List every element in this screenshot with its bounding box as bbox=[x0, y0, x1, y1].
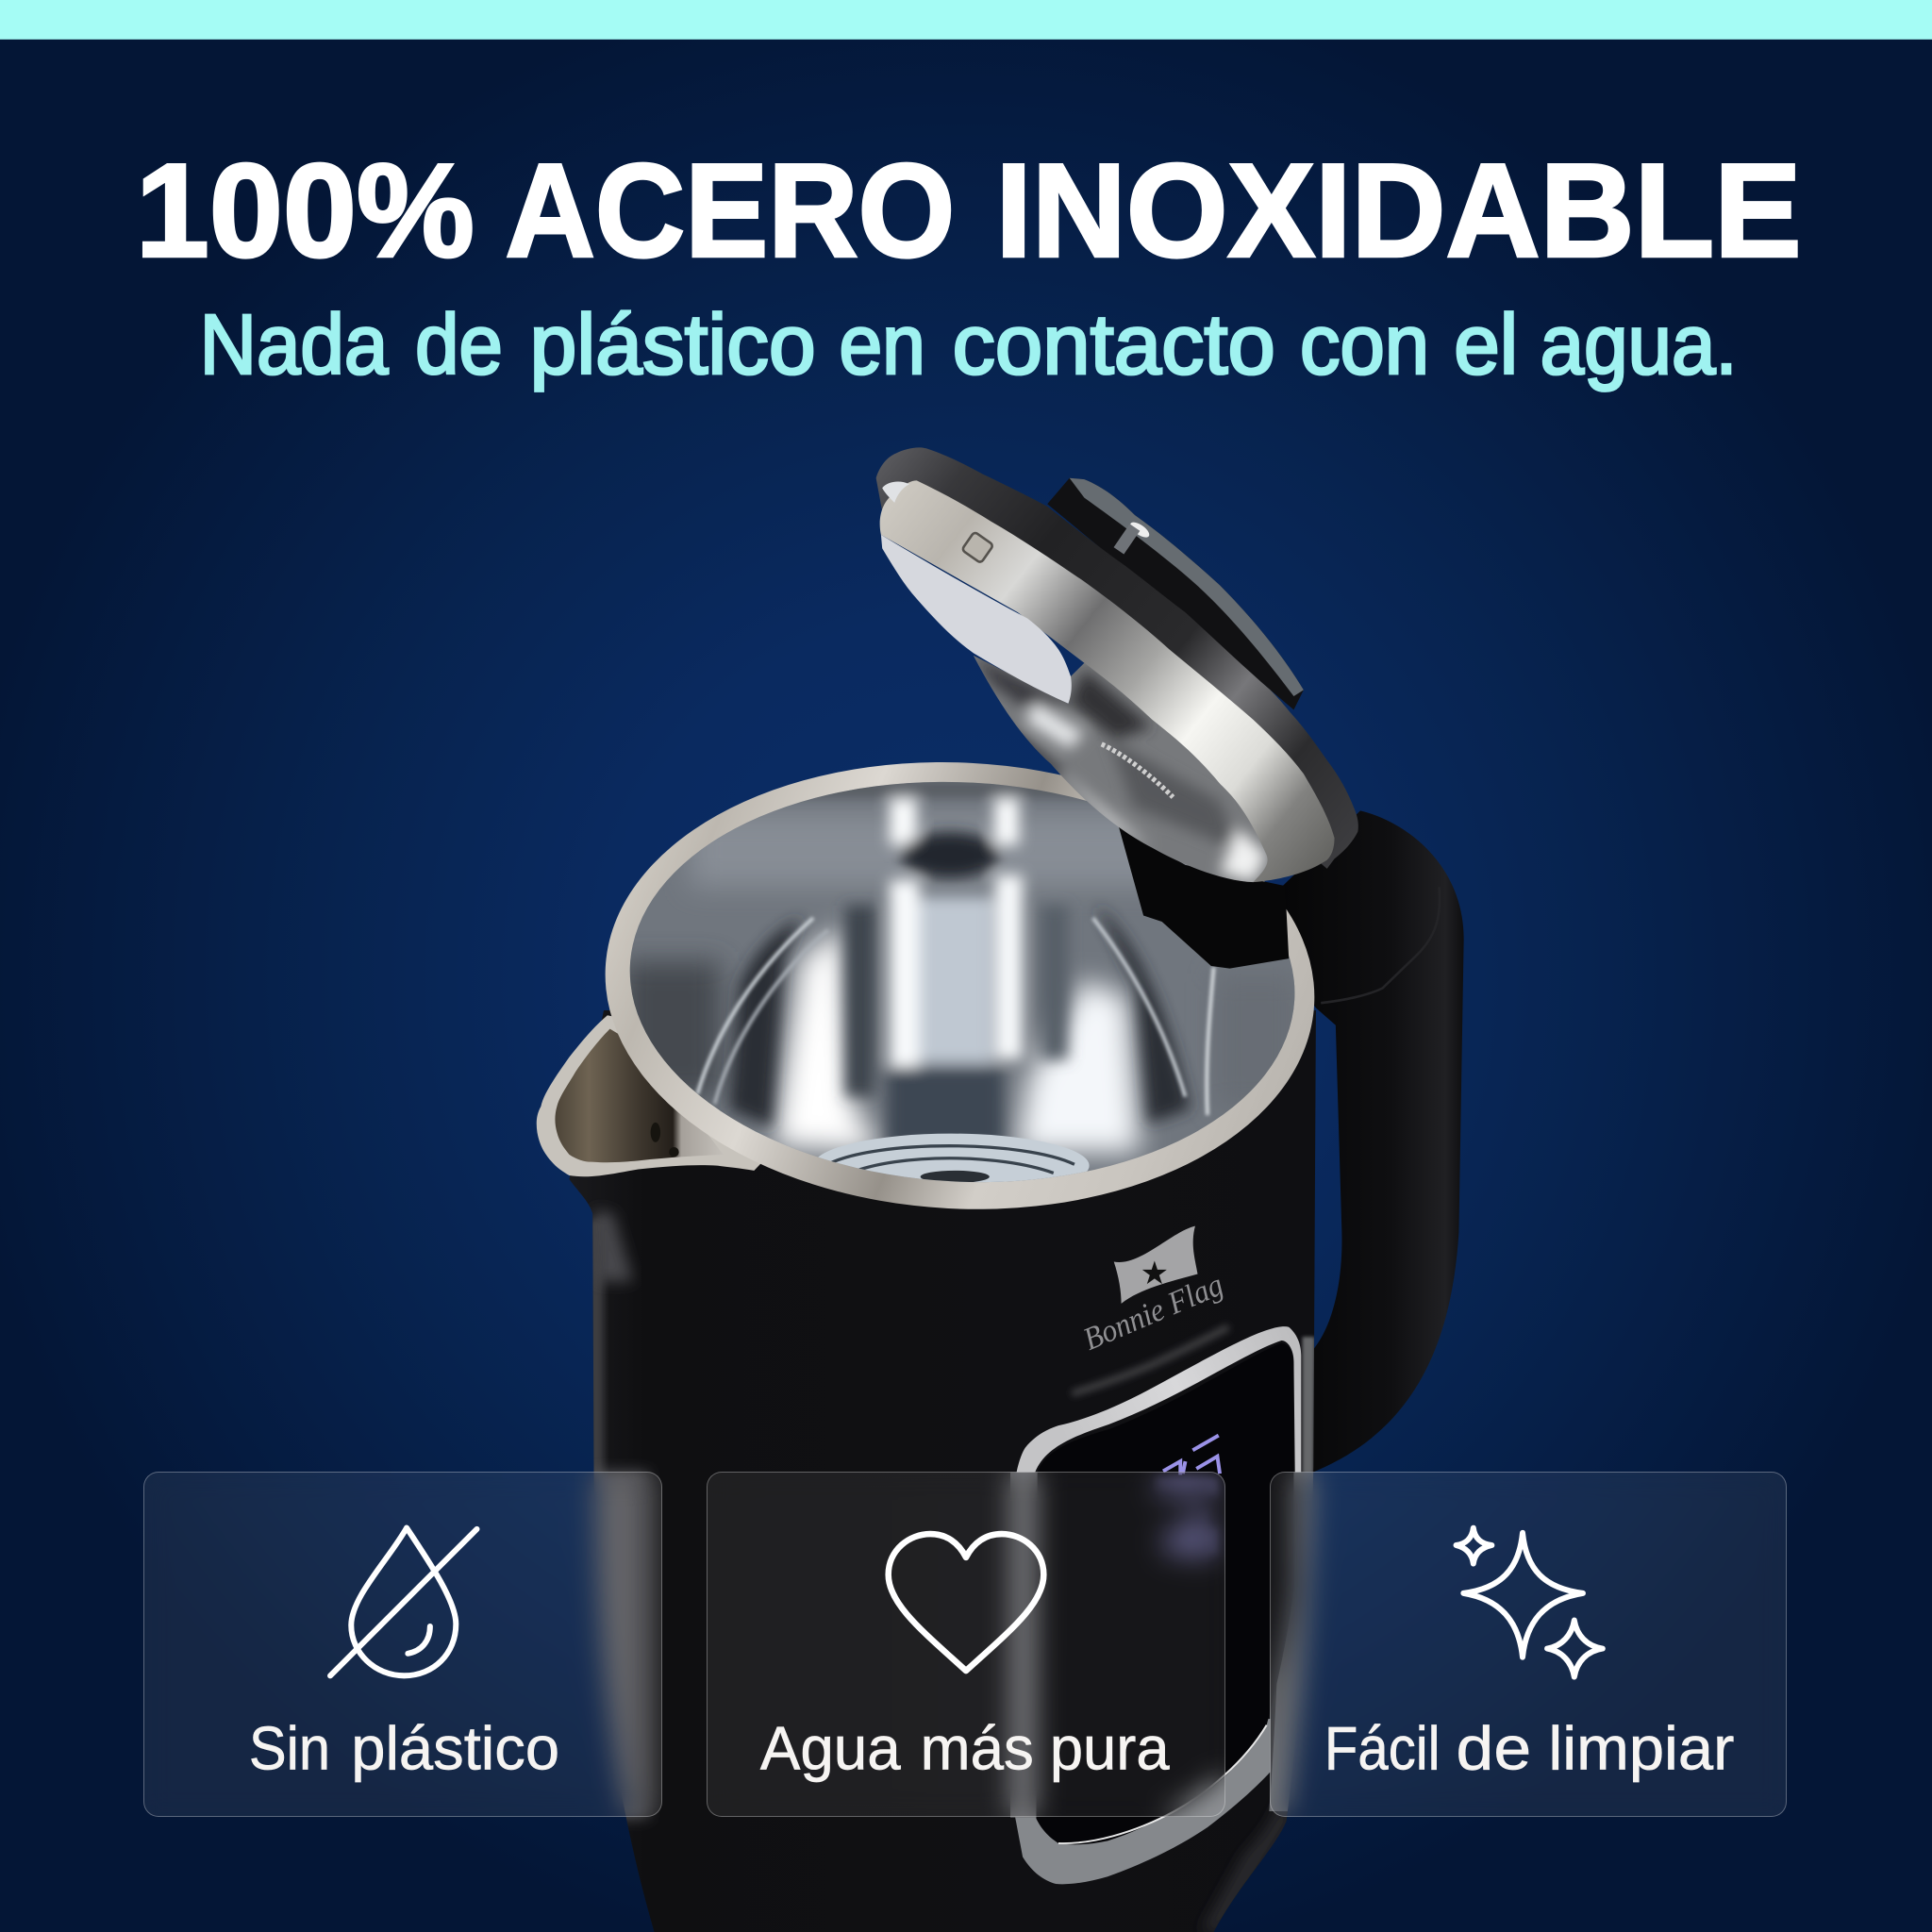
bezel lower highlight bbox=[1058, 1725, 1267, 1843]
thin left edge sheen bbox=[592, 1219, 608, 1475]
lid outer black ring bbox=[876, 447, 1358, 869]
kettle handle bbox=[1281, 810, 1464, 1474]
spout silver lip bbox=[537, 1015, 813, 1176]
star: ★ bbox=[1141, 1255, 1169, 1292]
subtitle: con bbox=[1300, 297, 1429, 392]
stainless rim bbox=[593, 744, 1325, 1227]
mirror reflection on glass bbox=[881, 535, 1072, 704]
display icons glow bbox=[1156, 1478, 1217, 1558]
label: más bbox=[920, 1713, 1033, 1782]
subtitle: Nada bbox=[200, 297, 389, 392]
display panel bbox=[1010, 1326, 1301, 1884]
title: INOXIDABLE bbox=[995, 136, 1802, 285]
kettle bbox=[537, 447, 1464, 1932]
subtitle: en bbox=[839, 297, 925, 392]
spout inside bbox=[555, 1029, 724, 1162]
lower bezel bbox=[1014, 1719, 1271, 1884]
label: Fácil bbox=[1324, 1713, 1440, 1782]
sheen above display bbox=[1072, 1327, 1228, 1393]
top bezel bbox=[1017, 1326, 1301, 1473]
label: de bbox=[1456, 1713, 1531, 1782]
kettle body bbox=[569, 1010, 1316, 1932]
glass engraved mark bbox=[1102, 744, 1173, 797]
lid silver band bbox=[880, 480, 1335, 882]
display digits bbox=[1163, 1436, 1220, 1474]
kettle base glass bbox=[819, 1134, 1090, 1183]
narrow soft reflections bbox=[723, 781, 1198, 1138]
right edge stripe behind panel bbox=[1269, 1473, 1315, 1811]
panel: sin plastico bbox=[143, 1472, 662, 1817]
label: limpiar bbox=[1548, 1713, 1734, 1782]
brand logo bbox=[1078, 1226, 1228, 1357]
upper left sheen bbox=[594, 1210, 633, 1281]
subtitle: el bbox=[1454, 297, 1518, 392]
panel: agua mas pura bbox=[707, 1472, 1225, 1817]
arc lines bbox=[697, 918, 1214, 1115]
label bbox=[1324, 1713, 1734, 1782]
subtitle: plástico bbox=[530, 297, 816, 392]
title: 100% bbox=[136, 136, 475, 285]
wide soft reflections bbox=[623, 813, 1300, 1152]
icon: heart bbox=[888, 1534, 1043, 1671]
button translucent cover bbox=[1070, 478, 1304, 696]
subtitle: contacto bbox=[953, 297, 1275, 392]
title bbox=[136, 136, 1802, 285]
left bezel behind panel bbox=[1010, 1473, 1038, 1818]
brand name: Bonnie Flag bbox=[1078, 1268, 1228, 1357]
handle shoulder highlight bbox=[1321, 887, 1440, 1003]
spout bbox=[537, 1015, 813, 1176]
interior base tone bbox=[630, 781, 1294, 1183]
lid rivet bbox=[961, 532, 993, 563]
label bbox=[248, 1713, 559, 1782]
glass reflections bbox=[974, 656, 1267, 882]
label: Sin bbox=[248, 1713, 330, 1782]
subtitle: agua. bbox=[1541, 297, 1738, 392]
button pin bbox=[1119, 527, 1135, 551]
top accent band bbox=[0, 0, 1932, 40]
label: Agua bbox=[759, 1713, 901, 1782]
subtitle bbox=[200, 297, 1738, 392]
label: pura bbox=[1049, 1713, 1170, 1782]
band white corner bbox=[882, 482, 909, 503]
lid bbox=[876, 447, 1358, 882]
underside glass bbox=[881, 535, 1268, 882]
left edge sheen behind panel bbox=[591, 1473, 648, 1818]
button highlight bbox=[1128, 520, 1152, 541]
hinge bbox=[1119, 826, 1289, 969]
display glass bbox=[1036, 1343, 1293, 1844]
kettle base arcs bbox=[828, 1146, 1074, 1173]
lid top button bbox=[1047, 478, 1304, 709]
panel: facil de limpiar bbox=[1270, 1472, 1787, 1817]
icon: sparkles bbox=[1456, 1527, 1602, 1676]
lower right sheen bbox=[1202, 1811, 1287, 1932]
lower glass tone bbox=[974, 656, 1268, 882]
flag bbox=[1114, 1226, 1198, 1304]
title: ACERO bbox=[506, 136, 955, 285]
label: plástico bbox=[351, 1713, 559, 1782]
icon: crossed water drop bbox=[330, 1527, 476, 1675]
label bbox=[759, 1713, 1170, 1782]
right edge stripe above panel bbox=[1303, 1337, 1315, 1474]
subtitle: de bbox=[415, 297, 503, 392]
body light reflections bbox=[587, 1210, 1315, 1932]
spout filter holes bbox=[651, 1123, 679, 1157]
kettle base centre bbox=[921, 1171, 990, 1183]
kettle interior bbox=[630, 781, 1294, 1183]
